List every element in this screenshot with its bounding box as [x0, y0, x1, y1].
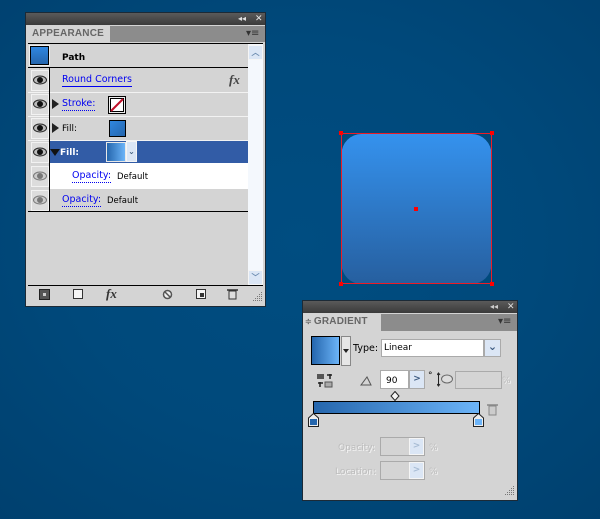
- icon: duplicate: [196, 289, 206, 299]
- gradient tab heading: ≑ GRADIENT: [305, 316, 368, 327]
- selection bounding box with handles: [339, 131, 494, 286]
- stroke expand arrow: [52, 99, 59, 109]
- appearance tab heading: [26, 26, 110, 42]
- fill expand arrow: [52, 123, 59, 133]
- row: opacity: [49, 189, 248, 211]
- panel: appearance: [26, 13, 265, 306]
- stroke link: Stroke:: [62, 98, 95, 109]
- round corners link: Round Corners: [62, 74, 132, 85]
- row: fill: [28, 117, 248, 141]
- path label: Path: [62, 53, 85, 63]
- type select button: ⌄: [488, 340, 497, 353]
- icon: add fill: [73, 289, 83, 299]
- icon: aspect ratio: [437, 372, 453, 387]
- nested opacity link: Opacity:: [72, 170, 111, 181]
- aspect ratio input: [455, 371, 502, 389]
- fill swatch: [109, 120, 126, 137]
- icon: fx menu: fx: [106, 286, 117, 301]
- scroll down arrow: [248, 270, 263, 285]
- black rule under tabs: [28, 43, 263, 44]
- type label: Type:: [353, 343, 378, 354]
- opacity link: Opacity:: [62, 194, 101, 205]
- row: opacity nested: [49, 163, 248, 189]
- resize grip: [505, 486, 514, 495]
- appearance tab heading: APPEARANCE: [32, 28, 104, 39]
- eye icon selected fill: [31, 142, 49, 163]
- panel menu icon: ▾≡: [246, 28, 259, 39]
- eye icon round corners: [31, 70, 49, 91]
- opacity value: Default: [107, 196, 138, 206]
- gradient title bar: ✕: [507, 302, 515, 312]
- type select button: [484, 339, 501, 357]
- nested opacity value: Default: [117, 172, 148, 182]
- row: selected fill: [49, 141, 248, 163]
- location input: [380, 461, 425, 480]
- panel menu icon: ▾≡: [498, 316, 511, 327]
- collapse arrow: [50, 149, 60, 156]
- percent sign: %: [502, 376, 511, 386]
- angle stepper: >: [413, 374, 421, 384]
- gradient tab heading: [303, 314, 381, 331]
- scroll up arrow: ︿: [252, 48, 260, 57]
- gradient tab row: [303, 314, 517, 331]
- fx icon: fx: [229, 72, 240, 87]
- gradient title bar: ◂◂: [490, 302, 498, 311]
- scroll up arrow: [248, 45, 263, 60]
- row: path: [28, 44, 248, 68]
- icon: add stroke: [39, 289, 50, 300]
- eye icon stroke: [31, 94, 49, 115]
- icon: trash: [227, 289, 238, 300]
- selected fill swatch: [106, 142, 126, 162]
- angle stepper: [409, 370, 425, 389]
- selected fill label: Fill:: [60, 148, 79, 158]
- appearance title bar: [26, 13, 265, 25]
- swatch dropdown: [341, 336, 351, 366]
- opacity percent: %: [429, 443, 438, 453]
- fill label: Fill:: [62, 124, 77, 134]
- visibility eye column: [28, 68, 50, 211]
- eye icon fill: [31, 118, 49, 139]
- eye icon nested opacity: [31, 166, 49, 187]
- swatch dropdown: ⌄: [128, 147, 135, 156]
- path swatch: [30, 46, 49, 65]
- stroke swatch none: [108, 96, 126, 114]
- location input: >: [413, 465, 420, 475]
- icon: delete stop: [487, 404, 498, 416]
- scrollbar: [248, 44, 263, 285]
- icon: reverse gradient: [317, 374, 332, 388]
- opacity input: [380, 437, 425, 456]
- appearance title bar: ✕: [255, 14, 263, 24]
- type select: [381, 339, 484, 357]
- panel: gradient: [303, 301, 517, 500]
- midpoint diamond: [390, 391, 400, 401]
- icon: clear: [162, 290, 172, 300]
- icon: angle: [360, 376, 372, 386]
- type select: Linear: [384, 343, 412, 353]
- rounded square artwork: [339, 131, 494, 286]
- gradient preview swatch: [311, 336, 340, 365]
- left gradient stop: [308, 413, 319, 427]
- degree symbol: °: [428, 371, 432, 381]
- eye icon opacity: [31, 190, 49, 211]
- scroll down arrow: ﹀: [252, 273, 260, 282]
- angle input: [380, 370, 409, 389]
- resize grip: [253, 292, 262, 301]
- location label: Location:: [335, 467, 376, 477]
- appearance tab row: [26, 26, 265, 42]
- gradient slider bar: [313, 401, 480, 414]
- right gradient stop: [473, 413, 484, 427]
- row: round corners: [28, 68, 248, 93]
- gradient title bar: [303, 301, 517, 313]
- bottom toolbar: [28, 285, 263, 306]
- angle input: 90: [386, 376, 397, 386]
- gradient rounded rectangle: [342, 134, 492, 284]
- swatch dropdown: [126, 141, 137, 162]
- rule under rows: [28, 211, 248, 212]
- row: stroke: [28, 93, 248, 117]
- location percent: %: [429, 467, 438, 477]
- opacity input: >: [413, 441, 420, 451]
- opacity label: Opacity:: [338, 443, 375, 453]
- appearance title bar: ◂◂: [238, 14, 246, 23]
